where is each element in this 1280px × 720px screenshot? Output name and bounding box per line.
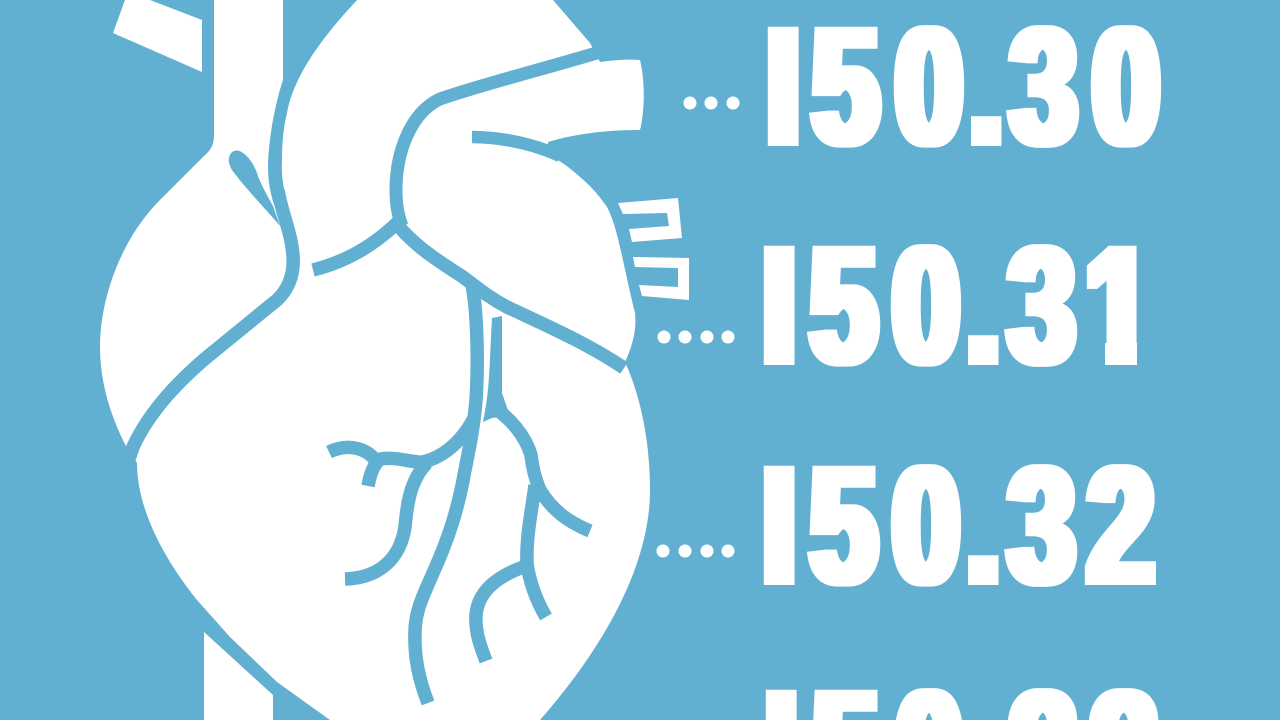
aortic arch vessel outline	[396, 44, 625, 226]
right lower artery	[527, 485, 546, 617]
dotted leader 1	[684, 96, 740, 110]
dotted leader 3	[656, 544, 734, 558]
code I50.32: I50.32	[763, 432, 1154, 618]
right atrium boundary	[128, 190, 293, 462]
hooked sub branch	[476, 566, 526, 661]
dotted leader 2	[658, 330, 734, 344]
icon: heart anatomy	[100, 0, 689, 720]
right vessel stub lower	[633, 257, 689, 300]
small side branch	[368, 458, 381, 486]
pulmonary atrium line	[472, 137, 560, 156]
second descending artery	[483, 316, 510, 422]
right vessel stub upper	[618, 198, 682, 242]
code I50.31: I50.31	[763, 212, 1152, 398]
atrial notch	[229, 151, 280, 226]
ventricle divider line	[400, 228, 624, 368]
heart silhouette	[100, 0, 650, 720]
descending artery	[415, 285, 477, 703]
lower left branch	[345, 463, 427, 579]
bottom-left vessel	[204, 632, 273, 720]
right branch artery	[492, 406, 590, 531]
short artery left	[313, 220, 400, 270]
left branch artery	[329, 418, 474, 462]
wedge between vena cava and aorta	[268, 0, 357, 205]
upper-left vessel stub	[113, 0, 202, 72]
